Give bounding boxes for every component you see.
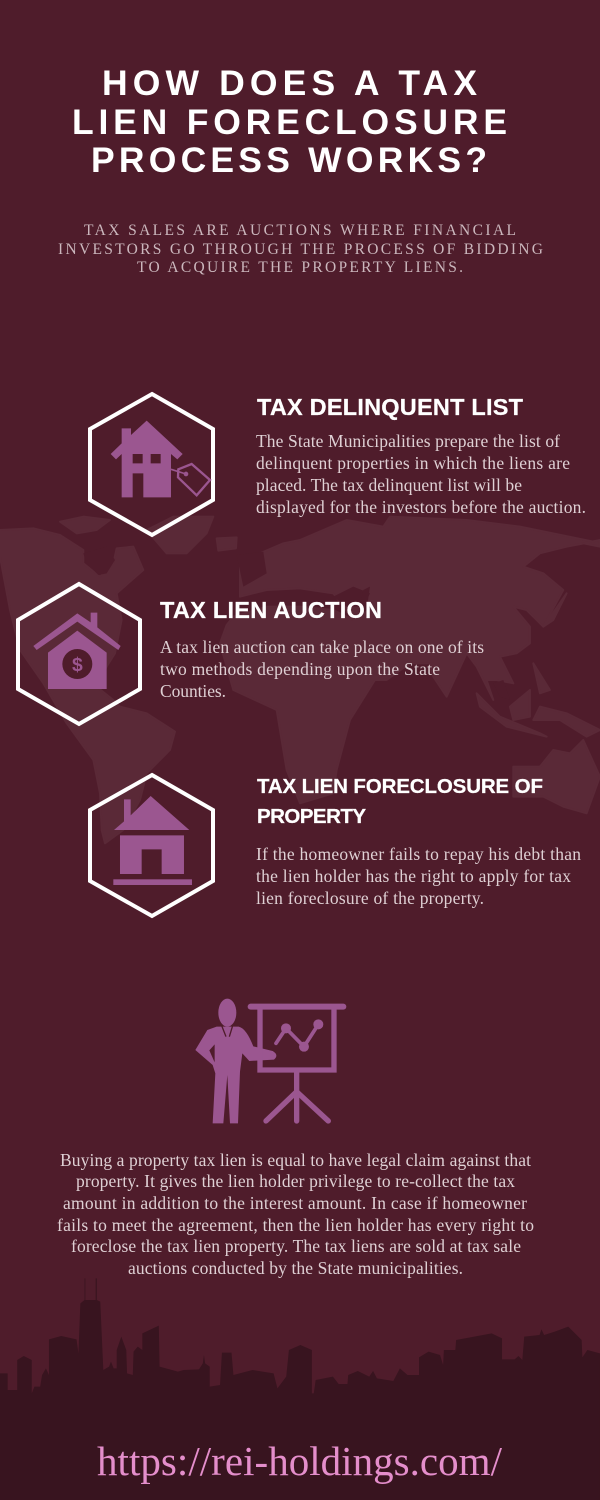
heading: PROPERTY <box>257 805 366 828</box>
body text <box>256 844 581 908</box>
heading: TAX LIEN FORECLOSURE OF <box>257 775 543 798</box>
body text: The State Municipalities prepare the list of <box>256 431 560 451</box>
icon: hexagon house with price tag <box>90 394 213 535</box>
summary paragraph: amount in addition to the interest amount. In case if homeowner <box>63 1193 527 1213</box>
summary paragraph: foreclose the tax lien property. The tax liens are sold at tax sale <box>71 1236 521 1256</box>
body text <box>256 431 586 517</box>
title: LIEN FORECLOSURE <box>72 102 507 142</box>
panel: tax lien foreclosure of property <box>90 775 581 916</box>
body text: delinquent properties in which the liens are <box>256 453 570 473</box>
website url: https://rei-holdings.com/ <box>97 1438 503 1484</box>
title <box>72 63 507 180</box>
body text: placed. The tax delinquent list will be <box>256 475 522 495</box>
body text <box>160 637 484 701</box>
heading: TAX LIEN AUCTION <box>160 597 382 623</box>
body text: A tax lien auction can take place on one of its <box>160 637 484 657</box>
summary paragraph: fails to meet the agreement, then the lien holder has every right to <box>57 1215 534 1235</box>
body text: two methods depending upon the State <box>160 659 440 679</box>
body text: Counties. <box>160 681 226 701</box>
subtitle text: INVESTORS GO THROUGH THE PROCESS OF BIDDING <box>58 241 543 258</box>
summary paragraph: property. It gives the lien holder privilege to re-collect the tax <box>76 1171 515 1191</box>
icon: hexagon house with dollar: $ <box>72 655 83 676</box>
subtitle text <box>58 222 543 276</box>
world map background <box>0 517 600 843</box>
title: HOW DOES A TAX <box>102 63 477 103</box>
summary paragraph <box>57 1150 534 1278</box>
icon: presenter with chart board <box>195 999 343 1123</box>
heading <box>257 775 543 828</box>
icon: hexagon house with dollar <box>18 584 140 724</box>
subtitle text: TAX SALES ARE AUCTIONS WHERE FINANCIAL <box>84 222 516 239</box>
body text: If the homeowner fails to repay his debt than <box>256 844 581 864</box>
panel: tax delinquent list <box>90 394 586 535</box>
title: PROCESS WORKS? <box>91 140 487 180</box>
panel: tax lien auction <box>18 584 484 724</box>
subtitle text: TO ACQUIRE THE PROPERTY LIENS. <box>137 259 463 276</box>
heading: TAX DELINQUENT LIST <box>257 394 524 420</box>
city skyline <box>0 1278 600 1500</box>
body text: displayed for the investors before the auction. <box>256 497 586 517</box>
summary paragraph: auctions conducted by the State municipalities. <box>128 1258 463 1278</box>
body text: lien foreclosure of the property. <box>256 888 484 908</box>
icon: hexagon house <box>90 775 213 916</box>
body text: the lien holder has the right to apply for tax <box>256 866 571 886</box>
summary paragraph: Buying a property tax lien is equal to have legal claim against that <box>60 1150 531 1170</box>
